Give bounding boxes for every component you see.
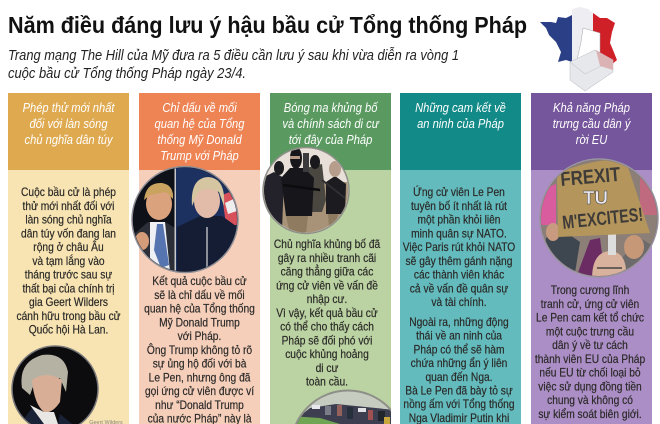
body text xyxy=(535,284,645,421)
body text: tháng trước sau sự xyxy=(25,269,112,282)
column heading: đối với làn sóng xyxy=(29,116,108,131)
column heading: thống Mỹ Donald xyxy=(157,132,243,147)
column heading xyxy=(531,93,652,170)
body text: chung và không có xyxy=(547,394,633,407)
body text: làn sóng chủ nghĩa xyxy=(25,214,113,227)
body text: cánh hữu trong bầu cử xyxy=(16,310,121,323)
body text: Le Pen cam kết tổ chức xyxy=(536,312,645,325)
body text: gây ra nhiều tranh cãi xyxy=(278,252,376,265)
panel background xyxy=(270,170,391,424)
body text: dân ý về tư cách xyxy=(552,339,628,352)
panel: column 1 xyxy=(8,93,129,424)
body text: nếu EU từ chối loại bỏ xyxy=(539,367,641,380)
body text: rộng ở châu Âu xyxy=(33,240,104,254)
body text: Vì vậy, kết quả bầu cử xyxy=(276,307,378,320)
column heading xyxy=(270,93,391,170)
panel background xyxy=(531,170,652,424)
photo: Donald Trump and Marine Le Pen xyxy=(132,165,240,275)
body text: một cuộc trưng cầu xyxy=(546,326,634,338)
column heading: an ninh của Pháp xyxy=(417,116,504,131)
body text: Chủ nghĩa khủng bố đã xyxy=(274,238,381,251)
panel background xyxy=(139,170,260,424)
column heading xyxy=(8,93,129,170)
body text: toàn cầu. xyxy=(306,376,348,389)
panel background xyxy=(400,170,521,424)
subtitle: cuộc bầu cử Tổng thống Pháp ngày 23/4. xyxy=(8,66,246,82)
panel: column 3 xyxy=(262,93,405,424)
body text: Cuộc bầu cử là phép xyxy=(21,186,116,199)
body text: Quốc hội Hà Lan. xyxy=(29,324,108,337)
body text: Ông Trump không tỏ rõ xyxy=(147,343,252,357)
column heading: Trump với Pháp xyxy=(160,148,239,163)
panel: column 2 xyxy=(132,93,260,424)
panel background xyxy=(8,170,129,424)
column heading: Phép thử mới nhất xyxy=(23,100,115,115)
body text: ứng cử viên về vấn đề xyxy=(276,280,378,292)
body text: và tài chính. xyxy=(431,296,487,309)
body text: cả về vấn đề quân sự xyxy=(410,283,508,295)
body text: Le Pen, nhưng ông đã xyxy=(149,372,251,384)
photo: Geert Wilders xyxy=(12,346,98,424)
body text: có thể cho thấy cách xyxy=(280,321,374,334)
photo: Frexit protest sign: TU xyxy=(583,188,608,208)
body text: Pháp sẽ đối phó với xyxy=(282,335,372,347)
column heading: và chính sách di cư xyxy=(282,116,380,131)
body text: cuộc khủng hoảng xyxy=(285,348,369,361)
body text: minh quân sự NATO. xyxy=(411,228,507,240)
body text: một phần khỏi liên xyxy=(418,214,500,227)
photo: armed militants xyxy=(262,147,352,236)
body text: Pháp có thể sẽ hàm xyxy=(414,344,504,357)
body text: chứa những ẩn ý liên xyxy=(411,358,507,370)
body text: sự ủng hộ đối với bà xyxy=(153,358,247,371)
column heading: chủ nghĩa dân túy xyxy=(25,132,113,147)
column heading: Bóng ma khủng bố xyxy=(284,100,379,115)
body text: và tạm lắng vào xyxy=(32,254,105,268)
body text: Kết quả cuộc bầu cử xyxy=(152,275,247,288)
column heading: Chỉ dấu về mối xyxy=(162,100,237,115)
body text: tuyên bố ít nhất là rút xyxy=(411,200,507,213)
photo: Frexit protest sign: FREXIT xyxy=(560,164,621,191)
panel: column 5 xyxy=(531,93,660,424)
column heading: quan hệ của Tổng xyxy=(155,116,245,131)
column heading xyxy=(139,93,260,170)
column heading xyxy=(400,93,521,170)
column heading: Những cam kết về xyxy=(415,100,506,115)
body text: Bà Le Pen đã bày tỏ sự xyxy=(405,385,513,398)
body text: tranh cử, ứng cử viên xyxy=(541,298,639,311)
column heading: Khả năng Pháp xyxy=(553,100,630,115)
body text: sự kiểm soát biên giới. xyxy=(538,408,642,421)
body text: thử mới nhất đối với xyxy=(23,200,114,213)
body text: nhập cư. xyxy=(307,293,347,306)
body text: quan hệ của Tổng thống xyxy=(144,303,255,316)
body text: quan đến Nga. xyxy=(425,371,493,384)
body text: dân túy vốn đang lan xyxy=(21,228,116,240)
body text xyxy=(16,186,121,337)
body text xyxy=(144,275,255,424)
body text: di cư xyxy=(316,362,338,375)
body text: Mỹ Donald Trump xyxy=(159,317,240,329)
body text: Ngoài ra, những động xyxy=(409,316,509,329)
body text: như “Donald Trump xyxy=(155,399,244,412)
photo: Frexit protest sign xyxy=(540,158,660,279)
body text: thất bại của chính trị xyxy=(22,283,115,295)
body text: các thành viên khác xyxy=(414,269,505,282)
title: Năm điều đáng lưu ý hậu bầu cử Tổng thống Pháp xyxy=(8,12,527,38)
column heading: rời EU xyxy=(576,132,608,147)
body text: gọi ứng cử viên được ví xyxy=(145,385,254,398)
body text: thái về an ninh của xyxy=(416,330,503,343)
body text: sẽ gây thêm gánh nặng xyxy=(406,255,512,268)
body text: Việc Paris rút khỏi NATO xyxy=(403,241,515,254)
subtitle xyxy=(8,47,459,82)
body text: Ứng cử viên Le Pen xyxy=(413,185,505,199)
body text: việc sử dụng đồng tiền xyxy=(538,381,642,393)
column heading: tới đây của Pháp xyxy=(289,132,373,147)
body text: với Pháp. xyxy=(178,330,221,343)
body text: căng thẳng giữa các xyxy=(281,265,374,279)
panel: column 4 xyxy=(400,93,521,424)
body text: thành viên EU của Pháp xyxy=(535,353,645,366)
body text: nồng ấm với Tổng thống xyxy=(403,399,515,411)
body text: sẽ là chỉ dấu về mối xyxy=(154,289,245,302)
icon: France map with ballot box xyxy=(540,7,617,91)
body text: Trong cương lĩnh xyxy=(551,284,629,297)
body text xyxy=(403,185,515,424)
photo: migrants crowd xyxy=(295,390,391,424)
subtitle: Trang mạng The Hill của Mỹ đưa ra 5 điều cần lưu ý sau khi vừa diễn ra vòng 1 xyxy=(8,47,459,64)
body text: gia Geert Wilders xyxy=(29,296,109,309)
column heading: trưng cầu dân ý xyxy=(553,116,631,131)
body text xyxy=(274,238,381,389)
